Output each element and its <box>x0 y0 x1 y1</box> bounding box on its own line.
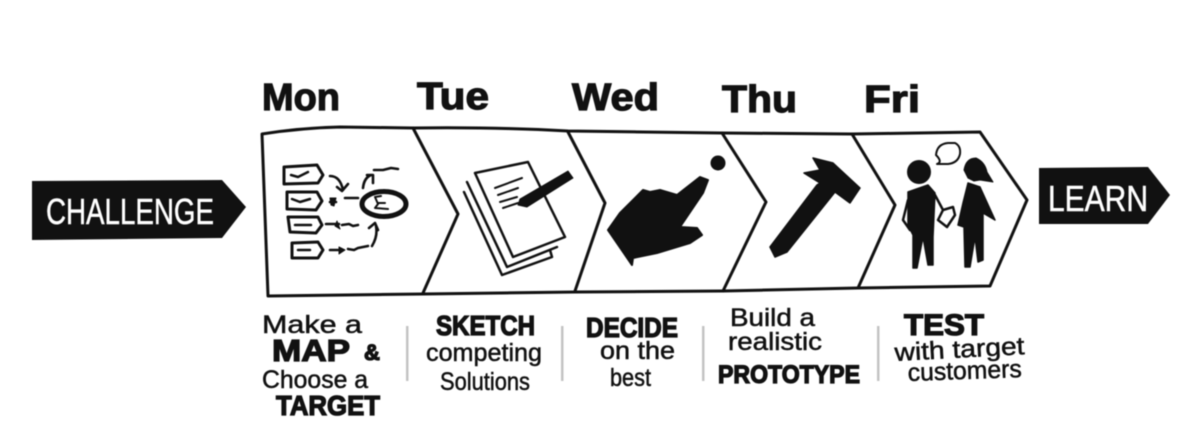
text: Monday task: MAP <box>272 333 350 368</box>
heading: Wed: Wed <box>572 77 659 119</box>
text: Friday task: customers <box>907 355 1022 387</box>
timeline: five-day chevron band <box>262 127 1027 296</box>
text: Thursday task: realistic <box>728 328 822 356</box>
text: Friday task: with target <box>893 332 1025 367</box>
text: Thursday task: Build a <box>730 304 815 332</box>
text: Monday task: & <box>364 340 380 365</box>
text: Thursday task <box>718 304 860 389</box>
heading: Mon: Mon <box>262 77 340 119</box>
text: Tuesday task <box>426 310 542 396</box>
text: Thursday task: PROTOTYPE <box>718 361 860 389</box>
end tag: learn <box>1039 167 1170 224</box>
end tag: learn: LEARN <box>1048 178 1148 219</box>
text: Friday task: TEST <box>904 309 984 342</box>
icon: pointing hand and dot <box>608 156 726 265</box>
heading: Fri: Fri <box>864 79 920 121</box>
text: Monday task: Make a <box>262 311 362 339</box>
heading: Tue: Tue <box>417 76 489 118</box>
text: Friday task <box>893 309 1025 387</box>
text: Monday task <box>262 311 380 421</box>
heading: Thu: Thu <box>722 79 797 121</box>
start tag: challenge <box>32 180 246 240</box>
dividers <box>406 326 880 381</box>
text: Monday task: Choose a <box>262 366 368 394</box>
text: Wednesday task <box>586 312 678 392</box>
text: Tuesday task: SKETCH <box>436 310 535 341</box>
text: Wednesday task: best <box>610 364 651 392</box>
text: Monday task: TARGET <box>276 390 380 421</box>
day headings <box>262 76 920 121</box>
text: Tuesday task: Solutions <box>440 368 530 396</box>
icon: map with target <box>284 165 406 258</box>
text: Wednesday task: on the <box>600 337 675 365</box>
icon: two people talking <box>903 143 995 268</box>
text: Tuesday task: competing <box>426 339 542 367</box>
start tag: challenge: CHALLENGE <box>46 191 214 232</box>
icon: papers and pen <box>464 162 573 275</box>
text: Wednesday task: DECIDE <box>586 312 678 343</box>
icon: hammer <box>770 158 860 257</box>
